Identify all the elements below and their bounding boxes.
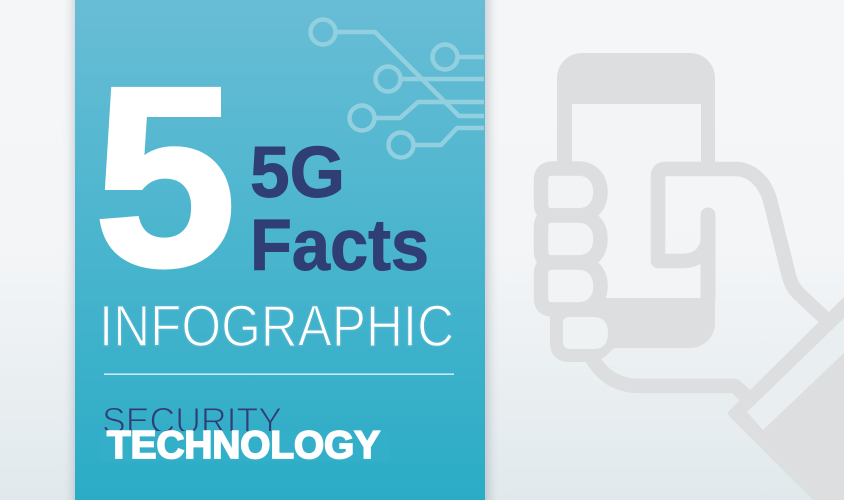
heading: 5G Facts: Facts — [250, 206, 429, 286]
heading: 5G Facts: 5G — [250, 133, 345, 213]
thumb — [658, 169, 829, 322]
subtitle: INFOGRAPHIC: INFOGRAPHIC — [99, 294, 454, 359]
blue panel — [75, 0, 485, 500]
phone body — [557, 53, 715, 348]
logo: Security Technology — [100, 400, 390, 467]
divider — [104, 374, 454, 375]
logo word: TECHNOLOGY: TECHNOLOGY — [107, 424, 380, 467]
big numeral 5: 5 — [94, 34, 236, 320]
heading: 5G Facts — [250, 133, 429, 286]
sleeve cuff — [728, 298, 844, 500]
logo word: SECURITY: SECURITY — [102, 400, 282, 441]
little finger — [550, 308, 614, 362]
icon: circuit traces — [310, 20, 484, 158]
arm line — [592, 358, 750, 400]
fingers — [541, 168, 600, 310]
icon: hand holding phone — [541, 53, 844, 500]
panel shadow — [73, 0, 489, 500]
